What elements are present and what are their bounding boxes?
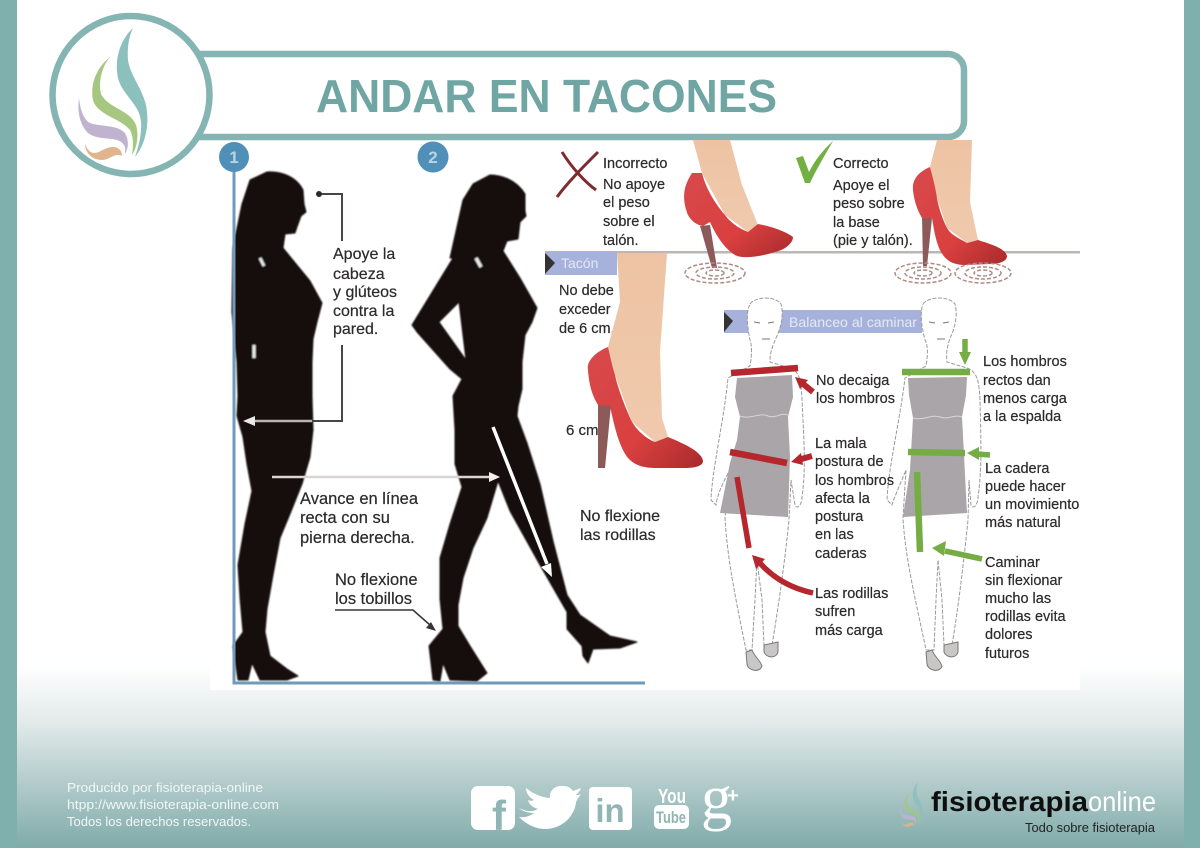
text: los hombros rectos: a la espalda bbox=[983, 409, 1062, 425]
banner: balanceo al caminar: Balanceo al caminar bbox=[789, 314, 917, 330]
text: apoye la cabeza: Apoye la bbox=[333, 246, 395, 263]
footer credits bbox=[67, 781, 279, 829]
step number 1: 1 bbox=[229, 148, 239, 167]
arrow: advance in straight line bbox=[272, 472, 500, 482]
text: la cadera: La cadera bbox=[985, 461, 1050, 477]
footer logo bbox=[900, 782, 1156, 827]
footer credits: Producido por fisioterapia-online bbox=[67, 781, 263, 795]
text: apoye la cabeza: pared. bbox=[333, 321, 378, 338]
silhouette 2: walking bbox=[412, 175, 637, 681]
text: incorrecto: Incorrecto bbox=[603, 156, 667, 172]
text: incorrecto: talón. bbox=[603, 233, 638, 249]
text: no flexione los tobillos: No flexione bbox=[335, 571, 418, 589]
red arrow heads bbox=[752, 377, 808, 569]
title banner bbox=[180, 54, 964, 137]
text: caminar: sin flexionar bbox=[985, 573, 1063, 589]
text: no decaiga los hombros: los hombros bbox=[816, 391, 895, 407]
text: 6 cm: 6 cm bbox=[566, 422, 599, 439]
title: ANDAR EN TACONES bbox=[316, 70, 777, 122]
text: no decaiga los hombros: No decaiga bbox=[816, 373, 889, 389]
icon: facebook bbox=[471, 786, 515, 839]
step number 2: 2 bbox=[428, 148, 438, 167]
text: avance en linea: Avance en línea bbox=[300, 490, 418, 508]
icon: green check bbox=[796, 141, 833, 183]
text: las rodillas: más carga bbox=[815, 623, 884, 639]
figure: correct posture outline bbox=[887, 298, 981, 670]
green arrow heads bbox=[932, 352, 979, 556]
green posture markers bbox=[902, 339, 990, 559]
text: apoye la cabeza: y glúteos bbox=[333, 284, 397, 301]
infographic white panel bbox=[210, 140, 1080, 690]
silhouette 1: standing against wall bbox=[232, 172, 322, 680]
text: avance en linea: pierna derecha. bbox=[300, 529, 415, 547]
text: incorrecto: el peso bbox=[603, 195, 650, 211]
text: caminar: futuros bbox=[985, 646, 1029, 662]
left sidebar bbox=[0, 0, 17, 848]
text: avance en linea: recta con su bbox=[300, 509, 390, 527]
footer credits: Todos los derechos reservados. bbox=[67, 815, 251, 829]
text: las rodillas: Las rodillas bbox=[815, 586, 888, 602]
logo tagline: Todo sobre fisioterapia bbox=[1025, 821, 1155, 835]
shoe: correct bbox=[895, 140, 1011, 283]
text: correcto: Correcto bbox=[833, 156, 889, 172]
text: no flexione las rodillas: las rodillas bbox=[580, 527, 656, 544]
icon: youtube bbox=[654, 786, 689, 829]
icon: youtube: You bbox=[658, 786, 686, 808]
text: caminar: dolores bbox=[985, 627, 1033, 643]
text: la cadera: puede hacer bbox=[985, 479, 1066, 495]
text: la mala postura: afecta la bbox=[815, 491, 871, 507]
text: la cadera: más natural bbox=[985, 515, 1061, 531]
footer gradient band bbox=[0, 665, 1200, 848]
logo wordmark bbox=[931, 786, 1156, 817]
text: no debe exceder: de 6 cm. bbox=[559, 321, 615, 337]
banner: tacon: Tacón bbox=[561, 255, 598, 271]
step number 1 bbox=[219, 142, 249, 172]
icon: linkedin bbox=[589, 787, 632, 830]
pointer: ankle bbox=[335, 610, 436, 631]
icon: red cross bbox=[557, 152, 598, 197]
text: correcto: (pie y talón). bbox=[833, 233, 913, 249]
icon: linkedin: in bbox=[595, 792, 625, 829]
text: no debe exceder: exceder bbox=[559, 302, 611, 318]
text: correcto: Apoye el bbox=[833, 178, 889, 194]
shoe: incorrect bbox=[684, 140, 793, 283]
figure: incorrect posture outline bbox=[711, 298, 804, 670]
step number 2 bbox=[418, 142, 448, 172]
text: correcto: la base bbox=[833, 215, 880, 231]
shoe: tall red pump bbox=[588, 253, 703, 468]
ground line bbox=[545, 251, 1080, 254]
text: apoye la cabeza: cabeza bbox=[333, 266, 385, 283]
text: la mala postura: los hombros bbox=[815, 473, 894, 489]
text: la cadera: un movimiento bbox=[985, 497, 1079, 513]
text: apoye la cabeza: contra la bbox=[333, 303, 394, 320]
text: caminar: mucho las bbox=[985, 591, 1051, 607]
text: incorrecto: No apoye bbox=[603, 177, 665, 193]
logo wordmark: online bbox=[1088, 786, 1156, 817]
logo circle with flame bbox=[52, 16, 210, 174]
text: correcto: peso sobre bbox=[833, 196, 905, 212]
text: la mala postura: La mala bbox=[815, 436, 867, 452]
text: la mala postura: postura de bbox=[815, 454, 884, 470]
text: la mala postura: postura bbox=[815, 509, 864, 525]
text: no debe exceder: No debe bbox=[559, 283, 614, 299]
text: no flexione las rodillas: No flexione bbox=[580, 508, 660, 525]
text: la mala postura: en las bbox=[815, 527, 854, 543]
icon: twitter bird bbox=[519, 786, 581, 829]
red posture markers bbox=[730, 368, 813, 593]
text: caminar: rodillas evita bbox=[985, 609, 1067, 625]
banner: balanceo al caminar bbox=[724, 310, 922, 333]
icon: google plus: + bbox=[727, 785, 739, 807]
right sidebar bbox=[1184, 0, 1200, 848]
text: los hombros rectos: rectos dan bbox=[983, 373, 1051, 389]
step 1 wall and floor axes bbox=[234, 168, 645, 683]
footer credits: htpp://www.fisioterapia-online.com bbox=[67, 798, 279, 812]
text: los hombros rectos: Los hombros bbox=[983, 354, 1067, 370]
banner: tacon bbox=[545, 252, 617, 275]
icon: google plus: g bbox=[701, 764, 732, 832]
text: los hombros rectos: menos carga bbox=[983, 391, 1068, 407]
text: las rodillas: sufren bbox=[815, 604, 855, 620]
text: la mala postura: caderas bbox=[815, 546, 867, 562]
arrow: wall guide from head to hips bbox=[243, 191, 342, 426]
arrow: white along front leg bbox=[493, 427, 552, 577]
icon: youtube: Tube bbox=[656, 808, 686, 827]
icon: facebook: f bbox=[492, 792, 507, 839]
logo wordmark: fisioterapia bbox=[931, 786, 1088, 817]
text: caminar: Caminar bbox=[985, 555, 1040, 571]
text: no flexione los tobillos: los tobillos bbox=[335, 590, 412, 608]
text: incorrecto: sobre el bbox=[603, 214, 655, 230]
